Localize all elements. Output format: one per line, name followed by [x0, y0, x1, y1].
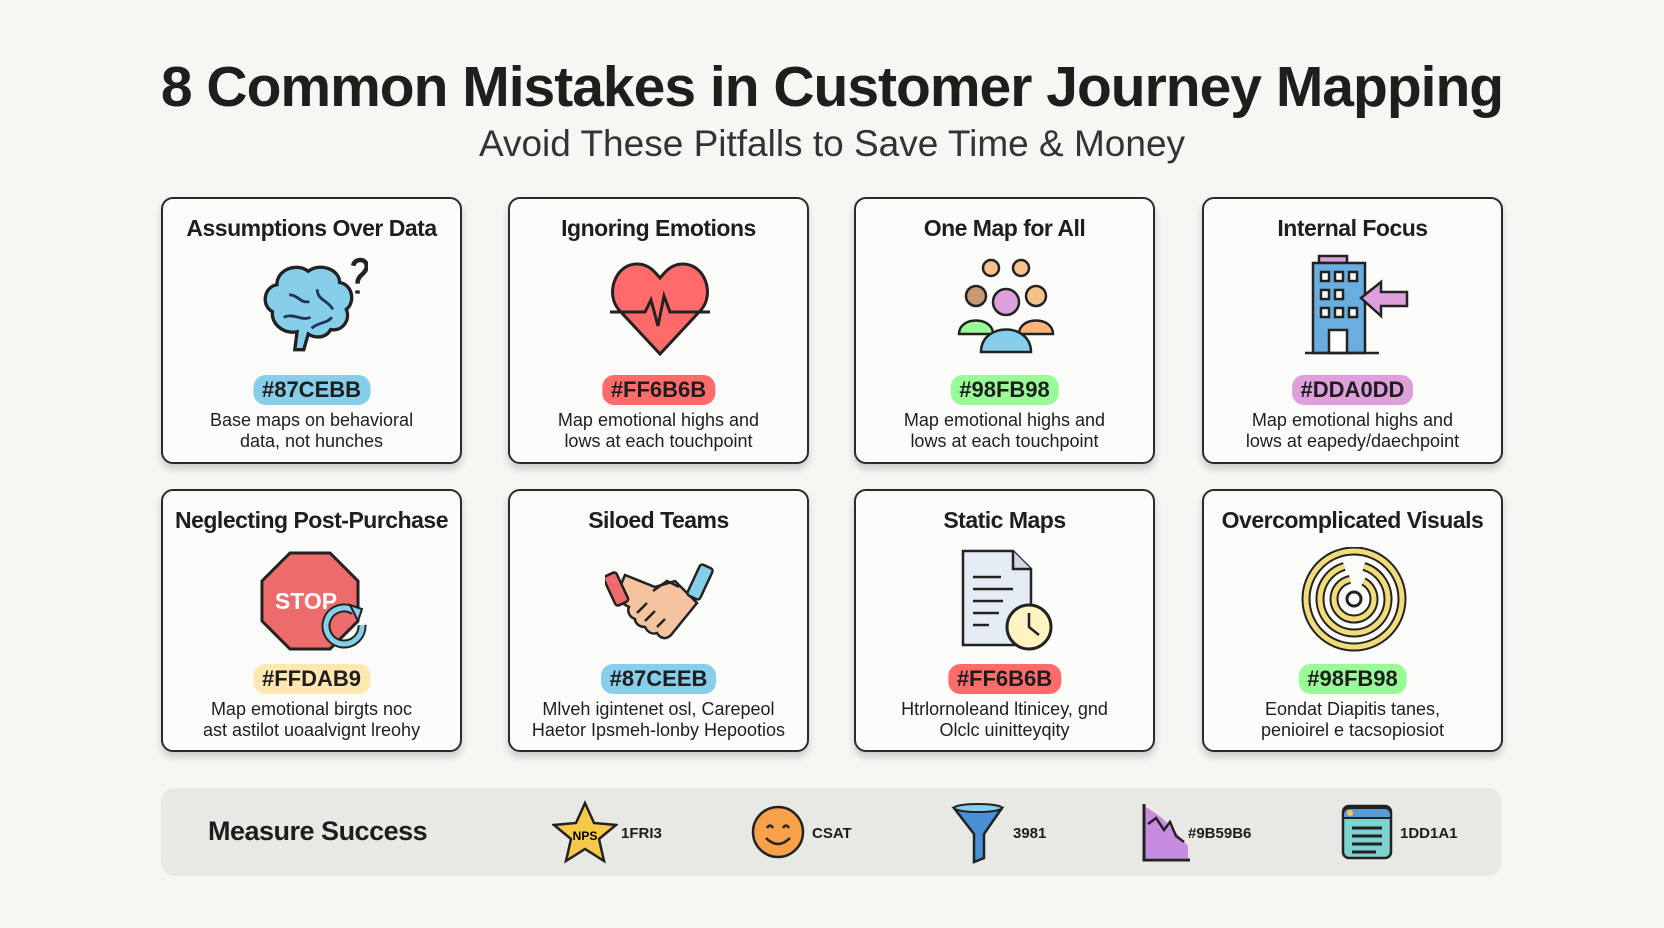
pill: #FF6B6B — [957, 666, 1052, 691]
panel: assumptions over data — [161, 197, 462, 464]
icon: stop sign — [260, 552, 366, 650]
pill: #87CEEB — [610, 666, 707, 691]
icon: star NPS: NPS — [573, 829, 597, 843]
heading: Measure Success — [208, 816, 427, 846]
title: 8 Common Mistakes in Customer Journey Mapping — [161, 55, 1503, 119]
panel: internal focus: Internal Focus — [1277, 215, 1428, 241]
description — [901, 699, 1108, 740]
icon: brain — [264, 258, 368, 352]
icon: handshake — [605, 563, 714, 640]
label: 3981 — [1013, 825, 1046, 842]
description: Haetor Ipsmeh-lonby Hepootios — [532, 720, 785, 740]
label: #9B59B6 — [1188, 825, 1251, 842]
description: Map emotional highs and — [558, 410, 759, 430]
pill: #FFDAB9 — [262, 666, 361, 691]
icon: maze — [1302, 547, 1406, 652]
description: lows at eapedy/daechpoint — [1246, 431, 1459, 451]
description: Olclc uinitteyqity — [939, 720, 1070, 740]
description: data, not hunches — [240, 431, 383, 451]
pill: #DDA0DD — [1301, 377, 1404, 402]
description — [1261, 699, 1444, 740]
description: ast astilot uoaalvignt lreohy — [203, 720, 420, 740]
description: lows at each touchpoint — [564, 431, 753, 451]
panel: overcomplicated visuals — [1202, 489, 1503, 752]
description — [1246, 410, 1459, 451]
label: 1FRI3 — [621, 825, 662, 842]
panel: siloed teams: Siloed Teams — [588, 507, 729, 533]
description: penioirel e tacsopiosiot — [1261, 720, 1444, 740]
label: 1DD1A1 — [1400, 825, 1458, 842]
panel: neglecting post-purchase: Neglecting Post-Purchase — [175, 507, 448, 533]
description: Map emotional highs and — [904, 410, 1105, 430]
description: Eondat Diapitis tanes, — [1265, 699, 1440, 719]
icon: funnel — [952, 803, 1004, 864]
description — [904, 410, 1105, 451]
description: Mlveh igintenet osl, Carepeol — [542, 699, 775, 719]
panel: measure success bar — [161, 788, 1502, 876]
panel: overcomplicated visuals: Overcomplicated Visuals — [1222, 507, 1483, 533]
subtitle: Avoid These Pitfalls to Save Time & Money — [479, 123, 1185, 164]
panel: siloed teams — [508, 489, 809, 752]
icon: heart — [610, 262, 710, 356]
icon: people — [958, 258, 1054, 354]
icon: document clock — [962, 550, 1052, 650]
pill — [950, 375, 1059, 405]
label: CSAT — [812, 825, 852, 842]
description: Map emotional highs and — [1252, 410, 1453, 430]
panel: assumptions over data: Assumptions Over Data — [186, 215, 437, 241]
icon: building — [1305, 254, 1408, 354]
panel: static maps: Static Maps — [943, 507, 1066, 533]
description: Map emotional birgts noc — [211, 699, 412, 719]
description — [203, 699, 420, 740]
pill: #87CEBB — [262, 377, 361, 402]
panel: neglecting post-purchase — [161, 489, 462, 752]
panel: ignoring emotions: Ignoring Emotions — [561, 215, 756, 241]
icon: star NPS — [552, 800, 618, 864]
description — [532, 699, 785, 740]
description: Htrlornoleand ltinicey, gnd — [901, 699, 1108, 719]
icon: chart down — [1142, 804, 1190, 862]
panel: one map for all — [854, 197, 1155, 464]
description: lows at each touchpoint — [910, 431, 1099, 451]
pill: #98FB98 — [959, 377, 1050, 402]
icon: document list — [1342, 804, 1392, 860]
panel: static maps — [854, 489, 1155, 752]
icon: stop sign: STOP — [275, 588, 337, 614]
panel: one map for all: One Map for All — [924, 215, 1085, 241]
panel: ignoring emotions — [508, 197, 809, 464]
pill: #FF6B6B — [611, 377, 706, 402]
description — [210, 410, 413, 451]
description — [558, 410, 759, 451]
pill: #98FB98 — [1307, 666, 1398, 691]
panel: internal focus — [1202, 197, 1503, 464]
icon: smiley — [752, 806, 804, 858]
pill — [1298, 664, 1407, 694]
description: Base maps on behavioral — [210, 410, 413, 430]
